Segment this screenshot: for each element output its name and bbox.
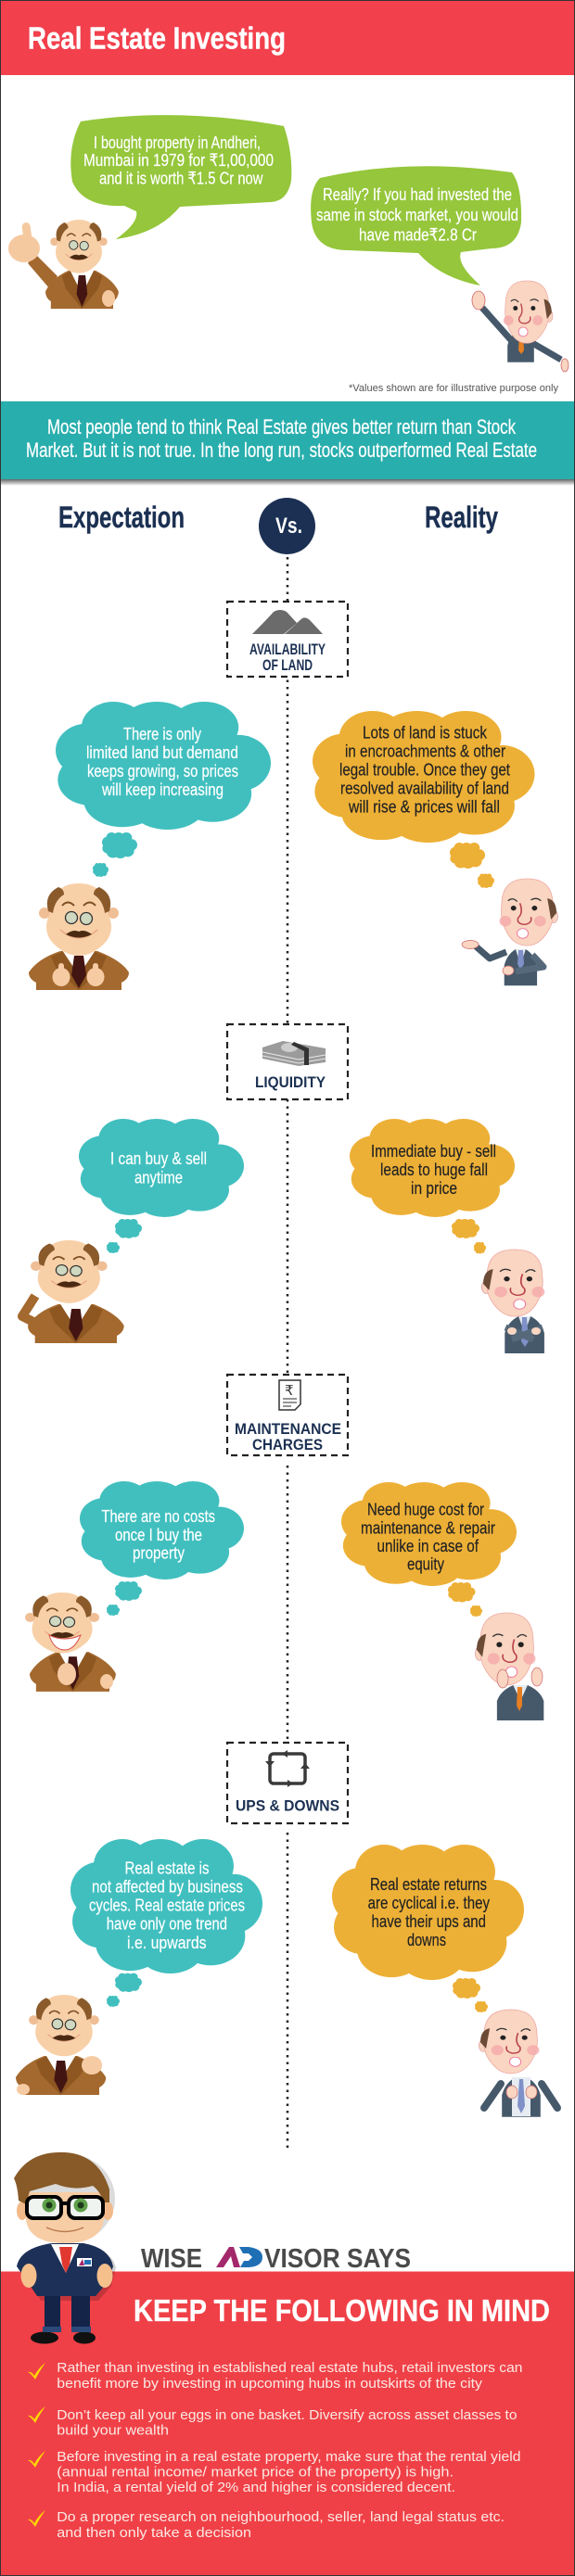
thought cloud: liquidity expectation: anytime bbox=[134, 1167, 183, 1186]
speech bubble: stock investor: have made₹2.8 Cr bbox=[359, 224, 477, 245]
speech bubble: property buyer: I bought property in Andheri, bbox=[94, 133, 261, 152]
teal statement banner bbox=[0, 401, 575, 486]
thought cloud: land reality: resolved availability of land bbox=[340, 778, 509, 797]
tip 4 bbox=[28, 2510, 505, 2541]
title: Real Estate Investing bbox=[28, 20, 286, 56]
icon: rupee document: ₹ bbox=[285, 1382, 294, 1399]
thought cloud: cycles expectation: i.e. upwards bbox=[127, 1933, 207, 1952]
thought cloud: land expectation: will keep increasing bbox=[101, 780, 224, 799]
tip 3: (annual rental income/ market price of the property) is high. bbox=[57, 2466, 454, 2481]
thought cloud: land reality: Lots of land is stuck bbox=[363, 722, 488, 742]
thought cloud: land expectation: limited land but demand bbox=[86, 742, 238, 762]
disclaimer note: *Values shown are for illustrative purpose only bbox=[349, 383, 558, 394]
thought cloud: liquidity reality: in price bbox=[411, 1178, 457, 1198]
central dotted divider bbox=[287, 557, 288, 2150]
thought cloud: land expectation: There is only bbox=[123, 724, 202, 743]
category: ups and downs bbox=[227, 1743, 348, 1823]
thought cloud: liquidity reality bbox=[350, 1119, 515, 1253]
thought cloud: land reality bbox=[313, 711, 534, 888]
thought cloud: cycles reality: Real estate returns bbox=[370, 1874, 487, 1894]
speech bubble: property buyer: Mumbai in 1979 for ₹1,00,000 bbox=[83, 150, 274, 170]
category: ups and downs: UPS & DOWNS bbox=[236, 1797, 339, 1815]
thought cloud: cycles reality: downs bbox=[407, 1930, 446, 1949]
thought cloud: liquidity reality: Immediate buy - sell bbox=[371, 1141, 496, 1161]
speech bubble: property buyer bbox=[70, 115, 291, 239]
thought cloud: land reality: will rise & prices will fall bbox=[348, 796, 500, 816]
thought cloud: cycles reality bbox=[332, 1845, 524, 2012]
icon: brown man hand on chin bbox=[16, 1995, 106, 2095]
icon: grey man hands on cheeks bbox=[475, 1613, 543, 1720]
tip 3: Before investing in a real estate property, make sure that the rental yield bbox=[57, 2450, 521, 2465]
icon: money stack bbox=[262, 1041, 326, 1066]
thought cloud: cycles expectation bbox=[70, 1839, 262, 2007]
speech bubble: stock investor: Really? If you had invested the bbox=[323, 184, 512, 204]
icon: grey suited man pointing bbox=[472, 281, 569, 372]
speech bubble: stock investor bbox=[311, 166, 521, 286]
thought cloud: land expectation bbox=[56, 702, 271, 877]
category: availability of land bbox=[227, 602, 348, 677]
icon: grey man arms crossed bbox=[481, 1250, 544, 1353]
tip 1: benefit more by investing in upcoming hubs in outskirts of the city bbox=[57, 2377, 483, 2392]
icon: grey man gesturing bbox=[462, 879, 557, 985]
heading: wise advisor says: WISE bbox=[141, 2244, 202, 2274]
icon: brown man thumbs up bbox=[29, 883, 129, 990]
tip 1: Rather than investing in established real estate hubs, retail investors can bbox=[57, 2361, 523, 2376]
header band bbox=[0, 1, 575, 75]
thought cloud: land expectation: keeps growing, so prices bbox=[87, 761, 238, 780]
thought cloud: cycles expectation: cycles. Real estate prices bbox=[89, 1895, 245, 1914]
category: maintenance charges bbox=[227, 1375, 348, 1455]
thought cloud: land reality: legal trouble. Once they get bbox=[339, 759, 510, 779]
speech bubble: stock investor: same in stock market, you would bbox=[316, 205, 518, 224]
tip 2 bbox=[28, 2406, 518, 2438]
thought cloud: liquidity reality: leads to huge fall bbox=[380, 1160, 488, 1179]
category: availability of land: OF LAND bbox=[262, 656, 313, 674]
logo: AD mark bbox=[216, 2247, 262, 2267]
thought cloud: maintenance expectation: property bbox=[133, 1542, 185, 1562]
tip 4: and then only take a decision bbox=[57, 2526, 251, 2541]
thought cloud: maintenance reality: maintenance & repair bbox=[361, 1517, 495, 1537]
thought cloud: land reality: in encroachments & other bbox=[345, 741, 505, 760]
thought cloud: maintenance reality: Need huge cost for bbox=[367, 1500, 484, 1519]
category: maintenance charges: MAINTENANCE bbox=[235, 1420, 341, 1438]
tip 4: Do a proper research on neighbourhood, seller, land legal status etc. bbox=[57, 2510, 505, 2525]
speech bubble: property buyer: and it is worth ₹1.5 Cr now bbox=[99, 169, 263, 187]
heading: expectation: Expectation bbox=[58, 501, 185, 534]
vs badge: Vs. bbox=[275, 514, 302, 539]
thought cloud: liquidity expectation bbox=[79, 1119, 244, 1253]
tip 2: Don’t keep all your eggs in one basket. Diversify across asset classes to bbox=[57, 2408, 518, 2423]
icon: mountains bbox=[252, 610, 323, 634]
category: liquidity bbox=[227, 1024, 348, 1099]
tip 1 bbox=[28, 2361, 523, 2392]
icon: brown man laughing bbox=[25, 1593, 116, 1692]
icon: brown man scratching head bbox=[22, 1240, 124, 1343]
thought cloud: maintenance expectation: once I buy the bbox=[115, 1525, 202, 1544]
thought cloud: maintenance reality: equity bbox=[407, 1554, 445, 1574]
thought cloud: cycles expectation: not affected by business bbox=[92, 1876, 243, 1896]
thought cloud: maintenance expectation: There are no costs bbox=[102, 1506, 215, 1526]
heading: wise advisor says: VISOR SAYS bbox=[264, 2244, 411, 2274]
icon: wise advisor character bbox=[14, 2152, 116, 2343]
icon: cycle arrows bbox=[265, 1750, 310, 1787]
tip 3 bbox=[28, 2450, 521, 2495]
thought cloud: liquidity expectation: I can buy & sell bbox=[110, 1148, 207, 1168]
thought cloud: cycles reality: are cyclical i.e. they bbox=[368, 1893, 491, 1912]
thought cloud: maintenance reality bbox=[341, 1482, 517, 1617]
vs badge bbox=[259, 498, 315, 554]
thought cloud: maintenance reality: unlike in case of bbox=[377, 1536, 479, 1555]
category: liquidity: LIQUIDITY bbox=[255, 1073, 326, 1091]
category: maintenance charges: CHARGES bbox=[252, 1436, 323, 1453]
category: availability of land: AVAILABILITY bbox=[249, 641, 326, 658]
icon: brown suited man pointing up bbox=[8, 220, 119, 309]
panel: keep the following in mind bbox=[0, 2271, 575, 2576]
heading: wise advisor says bbox=[141, 2244, 411, 2274]
thought cloud: maintenance expectation bbox=[80, 1481, 244, 1616]
tip 3: In India, a rental yield of 2% and higher is considered decent. bbox=[57, 2481, 455, 2495]
thought cloud: cycles reality: have their ups and bbox=[371, 1911, 486, 1931]
thought cloud: cycles expectation: have only one trend bbox=[107, 1913, 227, 1933]
thought cloud: cycles expectation: Real estate is bbox=[124, 1858, 210, 1877]
tip 2: build your wealth bbox=[57, 2423, 169, 2438]
icon: grey man holding lapels bbox=[479, 2010, 557, 2117]
heading: reality: Reality bbox=[425, 501, 498, 534]
